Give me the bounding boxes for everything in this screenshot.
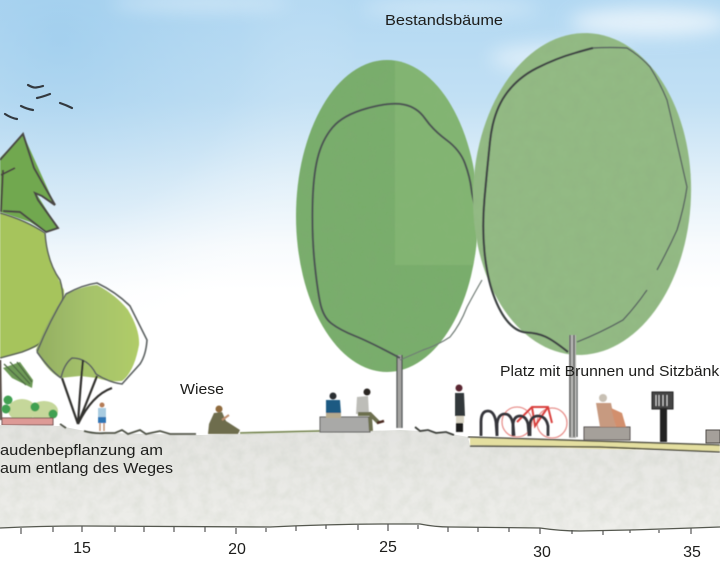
scale number 35: 35 [683,544,701,561]
label: Wiese: Wiese [180,382,224,398]
label: planting along the path: audenbepflanzung am [0,443,163,459]
label: Bestandsbäume: Bestandsbäume [385,13,503,29]
bench with two people [320,388,384,432]
round tree, far left [0,212,64,420]
existing tree, right [467,29,697,438]
person: child [98,402,106,431]
information board [652,392,673,442]
conifer tree [0,134,58,232]
label: planting along the path [0,443,173,477]
scale number 20: 20 [228,541,246,558]
existing tree, left [296,60,485,428]
scale number 15: 15 [73,540,91,557]
bench with seated figures [584,394,630,440]
sky background [0,0,720,340]
perennial planting bed [2,396,58,425]
label: planting along the path: aum entlang des Weges [0,461,173,477]
bicycle racks and bikes [481,407,567,438]
scale ticks [21,524,691,535]
person: standing [455,384,465,432]
scale number 30: 30 [533,544,551,561]
ground section [0,425,720,531]
small tree with branching trunk [36,283,147,424]
plaza surface [468,437,720,452]
label: Platz mit Brunnen und Sitzbänke: Platz mit Brunnen und Sitzbänke [500,364,720,380]
bench, right edge [706,430,720,443]
scale number 25: 25 [379,539,397,556]
person: sitting in meadow [208,406,240,434]
meadow vegetation [60,424,454,435]
birds [5,85,72,119]
